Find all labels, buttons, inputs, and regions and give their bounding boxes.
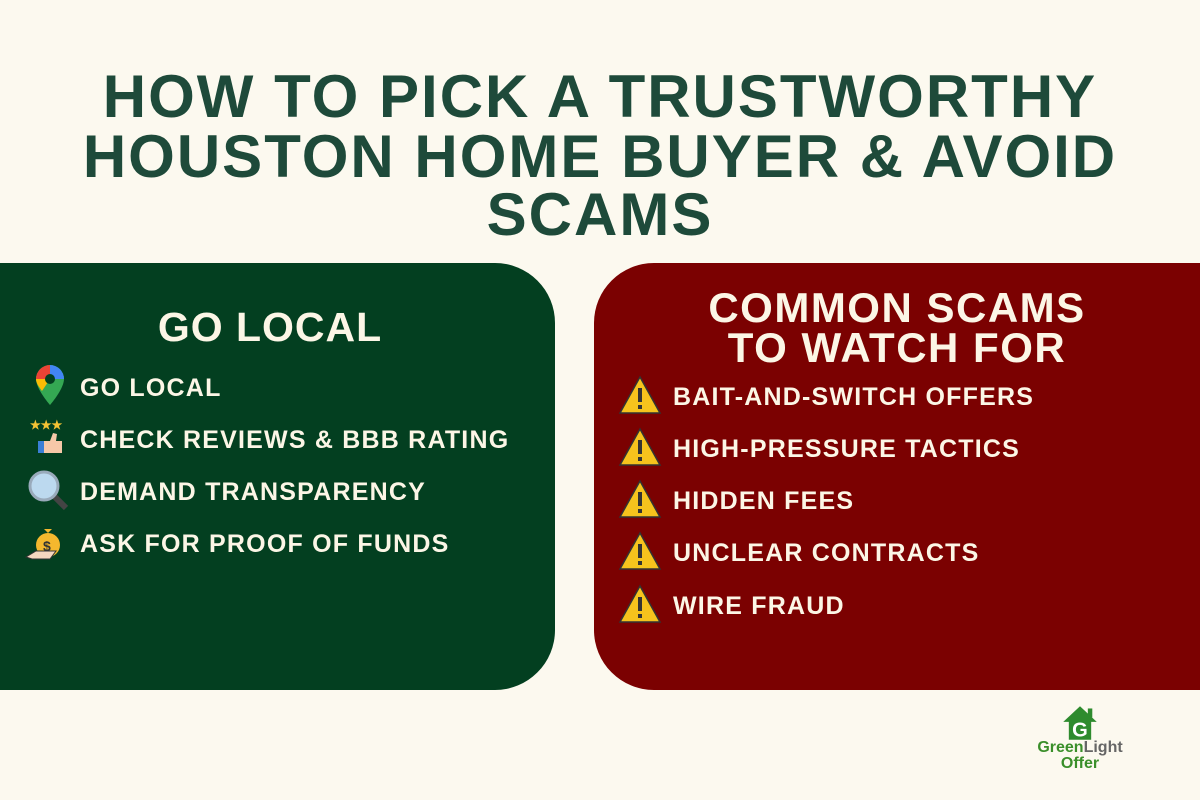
icon: map pin xyxy=(36,365,64,405)
logo: G xyxy=(1072,719,1088,741)
scam items xyxy=(618,376,1034,623)
item: bait: BAIT-AND-SWITCH OFFERS xyxy=(673,383,1034,411)
icon: money bag: $ xyxy=(43,538,51,554)
heading: common scams xyxy=(708,284,1086,371)
item: bait xyxy=(618,376,1034,414)
heading: common scams: COMMON SCAMS xyxy=(708,284,1086,331)
logo xyxy=(1037,706,1123,772)
logo: GreenLight xyxy=(1037,739,1123,756)
item: wire: WIRE FRAUD xyxy=(673,592,845,620)
title: HOUSTON HOME BUYER & AVOID xyxy=(83,123,1117,190)
panel: common scams xyxy=(594,263,1200,690)
heading: common scams: TO WATCH FOR xyxy=(728,324,1066,371)
item: pressure: HIGH-PRESSURE TACTICS xyxy=(673,435,1020,463)
item: contracts: UNCLEAR CONTRACTS xyxy=(673,539,980,567)
icon: thumbs up stars xyxy=(30,418,63,453)
title: HOW TO PICK A TRUSTWORTHY xyxy=(103,63,1097,130)
icon: money bag xyxy=(25,529,60,560)
item: go local: GO LOCAL xyxy=(80,374,222,402)
item: wire xyxy=(618,584,845,623)
item: pressure xyxy=(618,428,1020,466)
item: contracts xyxy=(618,532,980,570)
title: SCAMS xyxy=(487,181,713,248)
heading: go local: GO LOCAL xyxy=(158,304,382,350)
icon: magnifier xyxy=(28,470,68,510)
item: transparency: DEMAND TRANSPARENCY xyxy=(80,478,426,506)
logo: Offer xyxy=(1061,755,1099,772)
title xyxy=(83,63,1117,248)
icon: thumbs up stars: ★★★ xyxy=(30,418,63,432)
item: reviews: CHECK REVIEWS & BBB RATING xyxy=(80,426,509,454)
item: fees: HIDDEN FEES xyxy=(673,487,854,515)
panel: go local xyxy=(0,263,555,690)
item: funds: ASK FOR PROOF OF FUNDS xyxy=(80,530,449,558)
item: fees xyxy=(618,480,854,518)
